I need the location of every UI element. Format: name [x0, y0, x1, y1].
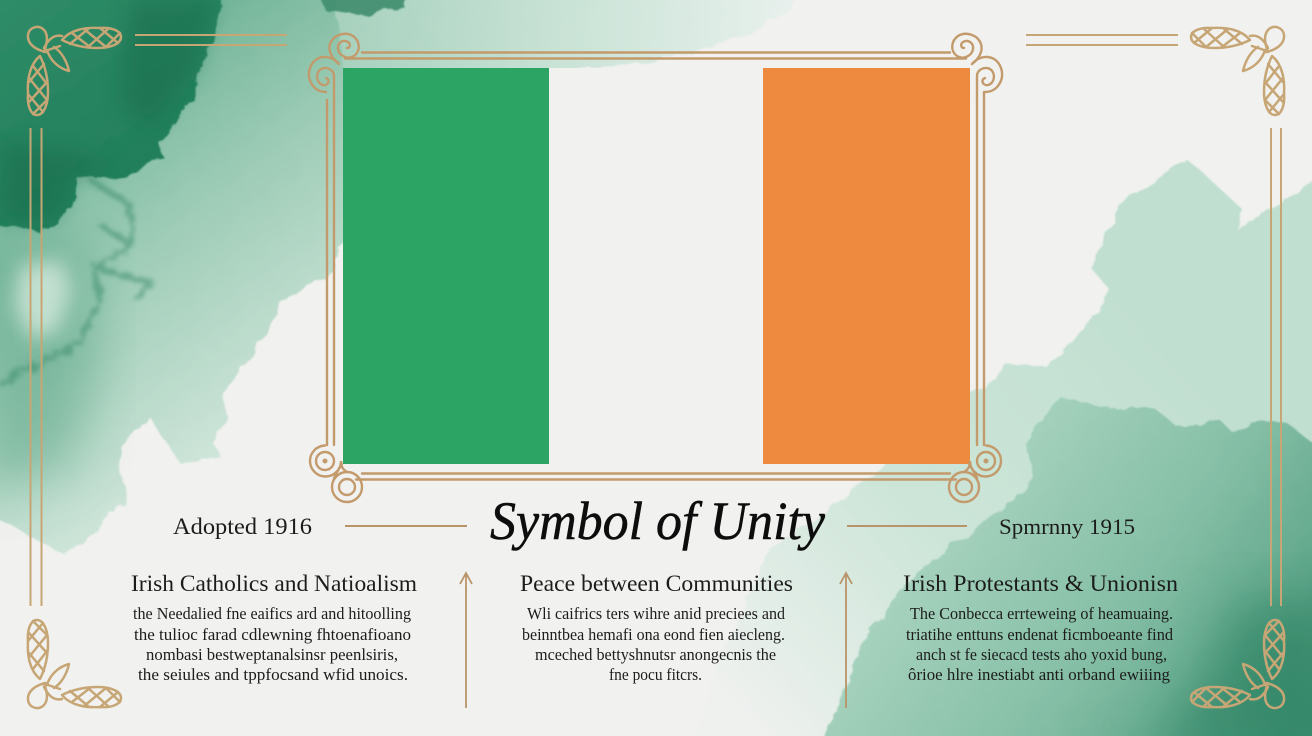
body text: Catholics — [133, 604, 411, 684]
flag: white stripe — [549, 68, 763, 464]
body text: Protestants: anch st fe siecacd tests aho yoxid bung, — [916, 645, 1167, 664]
date label: right: Spmrnny 1915 — [999, 514, 1135, 539]
flag: green stripe — [343, 68, 549, 464]
column: Peace — [520, 571, 793, 684]
heading: Peace: Peace between Communities — [520, 571, 793, 596]
ornamental flag frame — [309, 34, 1002, 502]
heading: Protestants: Irish Protestants & Unionisn — [903, 571, 1179, 596]
body text: Catholics: nombasi bestweptanalsinsr peenlsiris, — [146, 645, 398, 664]
body text: Peace: beinntbea hemafi ona eond fien aiecleng. — [522, 625, 785, 644]
title rules — [345, 525, 967, 527]
column: Protestants — [903, 571, 1179, 684]
body text: Catholics: the seiules and tppfocsand wfid unoics. — [138, 665, 408, 684]
frame spiral: bottom left rings — [316, 452, 362, 502]
frame spiral: bottom right rings — [949, 452, 995, 502]
knot: top left — [28, 27, 121, 115]
frame spiral: top left — [309, 34, 359, 100]
body text: Protestants — [906, 604, 1173, 684]
body text: Protestants: triatihe enttuns endenat ficmboeante find — [906, 625, 1173, 644]
body text: Protestants: The Conbecca errteweing of heamuaing. — [910, 604, 1173, 623]
arrow: right — [840, 573, 852, 708]
heading: Catholics: Irish Catholics and Natioalism — [131, 571, 417, 596]
body text: Peace: fne pocu fitcrs. — [609, 665, 702, 684]
body text: Peace: Wli caifrics ters wihre anid preciees and — [527, 604, 785, 623]
body text: Peace: mceched bettyshnutsr anongecnis the — [535, 645, 776, 664]
body text: Peace — [522, 604, 785, 684]
watercolor wash: lower right — [690, 160, 1312, 736]
flag: orange stripe — [763, 68, 970, 464]
knot: bottom left — [28, 620, 121, 708]
body text: Catholics: the Needalied fne eaifics ard and hitoolling — [133, 604, 411, 623]
column: Catholics — [131, 571, 417, 684]
watercolor wash: upper left — [0, 0, 810, 557]
date label: left: Adopted 1916 — [173, 514, 312, 539]
flag — [343, 68, 970, 464]
frame spiral: top right — [952, 34, 1002, 100]
frame spiral: bottom right — [964, 446, 1001, 478]
body text: Catholics: the tulioc farad cdlewning fhtoenafioano — [134, 625, 411, 644]
body text: Protestants: ôrioe hlre inestiabt anti orband ewiiing — [908, 665, 1170, 684]
knot: bottom right — [1191, 620, 1284, 708]
frame spiral: bottom left — [310, 446, 347, 478]
title: Symbol of Unity — [490, 491, 825, 551]
outer border lines — [30, 35, 1281, 606]
arrow: left — [460, 573, 472, 708]
knot: top right — [1191, 27, 1284, 115]
